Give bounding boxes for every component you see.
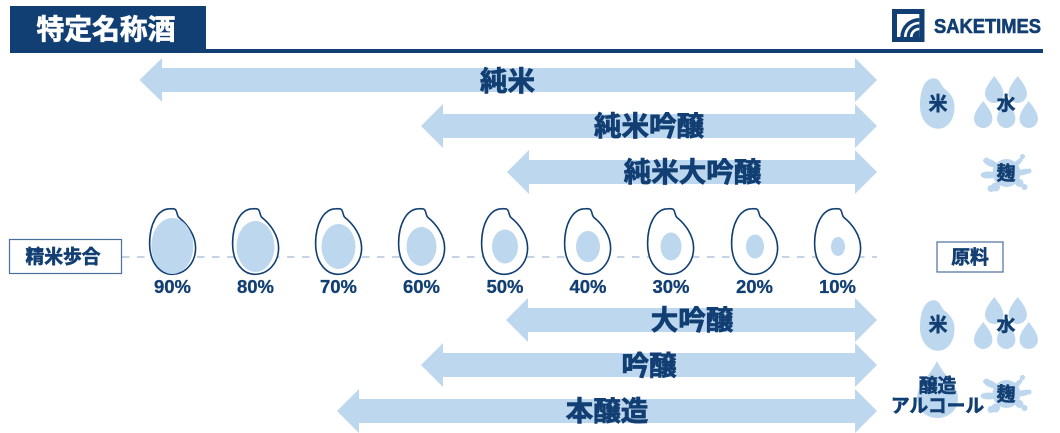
title xyxy=(10,6,206,53)
arrow: 本醸造: 本醸造 xyxy=(566,396,648,426)
rice grain: 50%: 50% xyxy=(486,276,524,297)
icon: koji (upper): 麹 xyxy=(997,162,1016,184)
arrow: 大吟醸: 大吟醸 xyxy=(651,304,734,336)
rice grain: 50% xyxy=(482,209,528,297)
icon: rice (upper) xyxy=(920,78,954,129)
arrow: 純米 xyxy=(140,58,877,102)
icon: brewing alcohol xyxy=(891,361,984,418)
rice grain: 60%: 60% xyxy=(403,276,440,297)
logo: SAKETIMES: SAKETIMES xyxy=(934,16,1041,38)
label: 精米歩合 xyxy=(10,240,122,274)
rice grain: 70% xyxy=(316,209,362,297)
label: 原料: 原料 xyxy=(951,246,989,268)
arrow: 純米: 純米 xyxy=(480,66,535,96)
icon: brewing alcohol: アルコール xyxy=(891,395,984,416)
rice grain: 90%: 90% xyxy=(154,276,191,297)
rice grain: 80% xyxy=(233,209,279,297)
icon: water (lower): 水 xyxy=(997,314,1016,335)
rice grain: 40% xyxy=(565,209,611,297)
rice grain: 30% xyxy=(648,209,694,297)
rice grain: 30%: 30% xyxy=(652,276,690,297)
icon: rice (upper): 米 xyxy=(929,93,948,114)
icon: brewing alcohol: 醸造 xyxy=(919,375,956,396)
arrow: 大吟醸 xyxy=(506,298,877,342)
rice grain: 20%: 20% xyxy=(736,276,773,297)
rice grain: 90% xyxy=(150,209,196,297)
rice grain: 70%: 70% xyxy=(320,276,357,297)
arrow: 純米大吟醸 xyxy=(507,150,877,194)
rice grain: 80%: 80% xyxy=(237,276,274,297)
logo: SAKETIMES xyxy=(892,9,1041,42)
icon: rice (lower) xyxy=(920,300,954,351)
icon: koji (upper) xyxy=(980,154,1032,192)
arrow: 純米吟醸: 純米吟醸 xyxy=(594,110,704,142)
rice grain: 20% xyxy=(732,209,778,297)
icon: koji (lower) xyxy=(980,375,1032,413)
dashed axis line xyxy=(122,256,877,258)
rice grain: 40%: 40% xyxy=(569,276,607,297)
arrow: 吟醸 xyxy=(421,343,877,387)
icon: water (upper) xyxy=(974,76,1038,128)
rice grain: 10%: 10% xyxy=(819,276,856,297)
icon: rice (lower): 米 xyxy=(929,314,948,335)
arrow: 本醸造 xyxy=(337,389,877,433)
rice grain: 10% xyxy=(815,209,861,297)
arrow: 純米大吟醸: 純米大吟醸 xyxy=(624,156,762,188)
icon: water (upper): 水 xyxy=(997,93,1016,114)
rice grain: 60% xyxy=(399,209,445,297)
label: 精米歩合: 精米歩合 xyxy=(25,246,101,267)
label: 原料 xyxy=(937,242,1003,272)
arrow: 純米吟醸 xyxy=(421,104,877,148)
title: 特定名称酒 xyxy=(36,14,176,45)
arrow: 吟醸: 吟醸 xyxy=(622,350,677,381)
icon: water (lower) xyxy=(974,297,1038,349)
header rule xyxy=(10,49,1043,53)
icon: koji (lower): 麹 xyxy=(997,384,1016,404)
